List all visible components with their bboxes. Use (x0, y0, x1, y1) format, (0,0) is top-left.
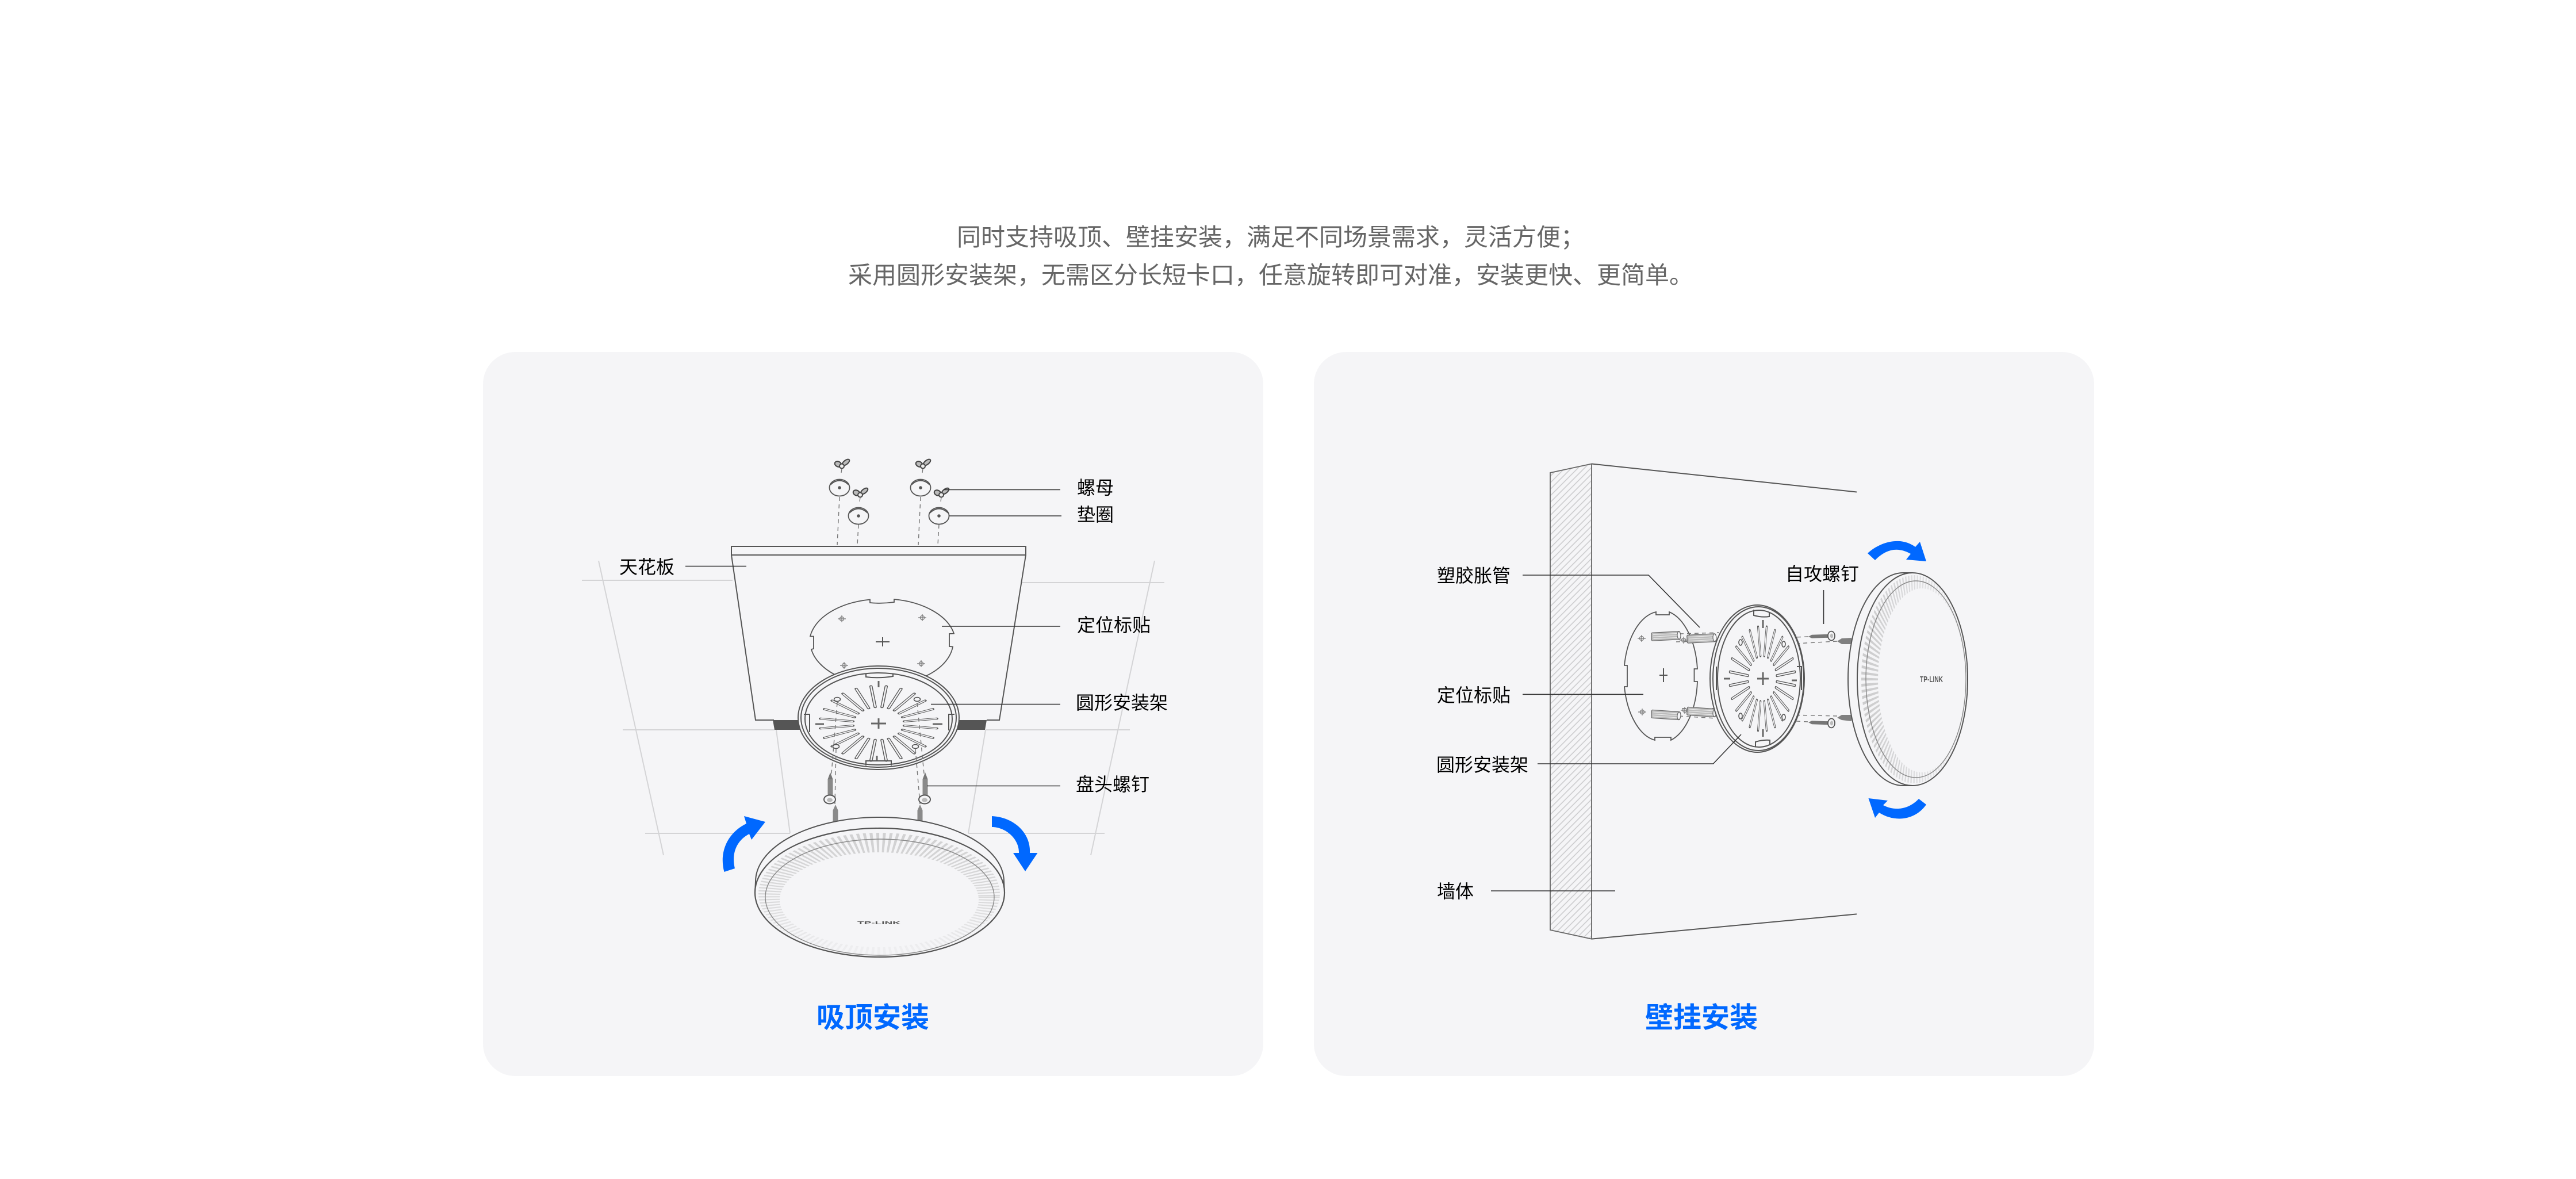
label: nut: 螺母 (1077, 477, 1114, 498)
dashed guide lines to screws (831, 703, 924, 804)
positioning sticker (1624, 612, 1697, 740)
label: positioning sticker: 定位标贴 (1437, 685, 1511, 706)
icon: plastic wall anchors (1651, 631, 1716, 720)
heading: wall mount: 壁挂安装 (1645, 1002, 1758, 1033)
label: pan head screw: 盘头螺钉 (1076, 774, 1149, 795)
intro text: 采用圆形安装架，无需区分长短卡口，任意旋转即可对准，安装更快、更简单。 (848, 256, 1693, 291)
heading: ceiling mount: 吸顶安装 (816, 1002, 929, 1033)
label: circular bracket: 圆形安装架 (1436, 755, 1528, 775)
access point, wall view: TP-LINK (1920, 675, 1943, 684)
dashed guide lines to washers (837, 497, 939, 545)
label: ceiling: 天花板 (619, 557, 674, 577)
label: circular bracket (1436, 734, 1741, 775)
positioning sticker (810, 599, 954, 686)
dark ceiling opening bands (773, 720, 987, 730)
ceiling slab (731, 546, 1026, 720)
arrow: rotate upper (1868, 541, 1926, 561)
dashed alignment guides (1676, 633, 1837, 722)
intro text: 同时支持吸顶、壁挂安装，满足不同场景需求，灵活方便； (957, 218, 1585, 253)
label: circular bracket: 圆形安装架 (1076, 692, 1168, 713)
panel: wall mount (1314, 352, 2094, 1076)
label: self-tapping screw (1785, 564, 1859, 624)
circular mounting bracket (798, 666, 959, 770)
panel: ceiling mount (483, 352, 1263, 1076)
icon: washers (829, 480, 949, 525)
label: self-tapping screw: 自攻螺钉 (1785, 564, 1859, 584)
access point, ceiling view (755, 805, 1005, 957)
icon: self-tapping screws (1808, 631, 1835, 728)
label: plastic anchor: 塑胶胀管 (1437, 565, 1511, 586)
label: positioning sticker: 定位标贴 (1077, 615, 1151, 636)
intro text (848, 218, 1693, 291)
icon: pan head screws (824, 772, 930, 804)
access point, ceiling view: TP-LINK (857, 920, 901, 925)
access point, wall view (1837, 573, 1968, 786)
room perspective guide lines (582, 561, 1164, 855)
circular mounting bracket (1710, 605, 1804, 752)
arrow: rotate left (723, 816, 765, 872)
arrow: rotate right (992, 816, 1037, 871)
label: wall: 墙体 (1437, 881, 1474, 902)
icon: wing nuts (834, 458, 950, 502)
label: washer: 垫圈 (1077, 504, 1114, 525)
label: plastic anchor (1437, 565, 1700, 627)
wall (1550, 464, 1857, 939)
arrow: rotate lower (1869, 798, 1926, 818)
